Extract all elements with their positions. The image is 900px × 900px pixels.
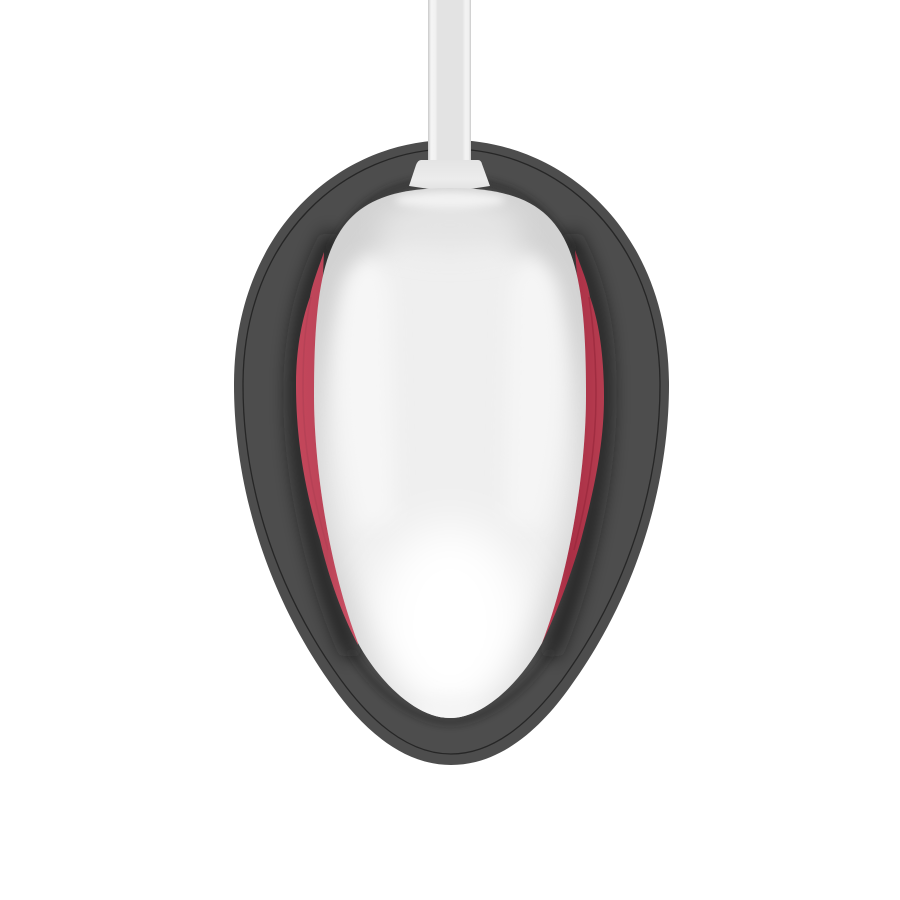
- outer dark ring: [234, 140, 669, 765]
- white egg body: [314, 188, 586, 729]
- stem: [428, 0, 471, 165]
- left red insert: [296, 252, 358, 645]
- right red insert: [541, 250, 604, 645]
- collar: [409, 160, 490, 192]
- product illustration: [234, 0, 669, 765]
